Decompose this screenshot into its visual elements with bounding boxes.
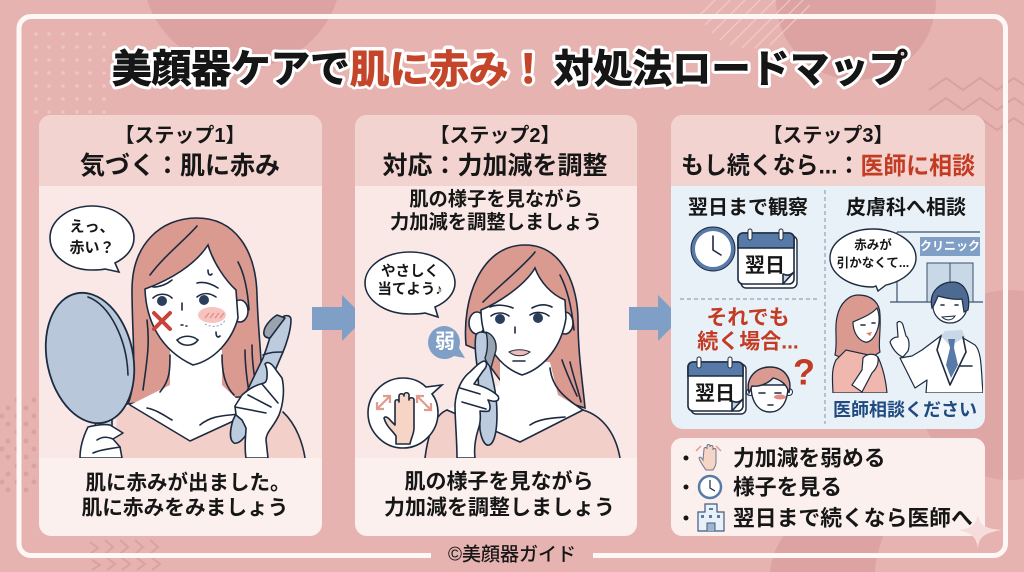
title: [112, 48, 908, 92]
warning text: [697, 306, 799, 354]
speech bubble: gentle: 当てよう♪: [377, 280, 443, 298]
sparkle: [958, 514, 1002, 548]
badge: weak: [428, 326, 465, 359]
hand holding device: [235, 363, 283, 458]
consult caption: 医師相談ください: [833, 400, 977, 420]
hand holding device: [455, 361, 499, 458]
arrow: step 1 to 2: [312, 295, 365, 341]
hand icon bubble: [368, 378, 442, 448]
arrow: step 2 to 3: [629, 295, 681, 341]
question mark: ?: [793, 352, 815, 392]
step 2 intro text: [390, 188, 602, 234]
speech bubble: consultation: 赤みが: [854, 237, 892, 252]
step 3 heading: もし続くなら...：医師に相談: [681, 152, 975, 180]
speech bubble: gentle: やさしく: [381, 263, 439, 280]
step 1 caption: 肌に赤みをみましょう: [82, 496, 288, 520]
step 1 label: 【ステップ1】: [114, 124, 246, 147]
icon: clock: [691, 227, 735, 271]
badge: weak: 弱: [435, 330, 455, 353]
illustration: clinic consultation: [832, 232, 983, 393]
hand mirror: [44, 292, 136, 458]
speech bubble: surprised: えっ、: [69, 218, 115, 236]
speech bubble: consultation: 引かなくて...: [837, 256, 909, 270]
speech bubble: surprised: 赤い？: [69, 240, 115, 256]
item: see doctor: 翌日まで続くなら医師へ: [733, 506, 973, 530]
item: reduce pressure: 力加減を弱める: [733, 446, 886, 470]
footer credit: ©美顔器ガイド: [448, 544, 576, 566]
illustration: woman noticing redness: [34, 206, 305, 458]
step 2 intro text: 肌の様子を見ながら: [409, 188, 583, 210]
step 2 heading: 対応：力加減を調整: [382, 152, 608, 180]
item: watch condition: 様子を見る: [733, 474, 842, 500]
step 2 label: 【ステップ2】: [429, 124, 561, 147]
icon: calendar second: 翌日: [695, 383, 735, 405]
panel: step 3: [671, 115, 985, 429]
step 1 caption: [82, 470, 290, 520]
speech bubble: gentle: [365, 252, 455, 317]
title: 美顔器ケアで肌に赤み！: [112, 48, 548, 92]
icon: calendar second: [688, 357, 746, 414]
facial device: [230, 315, 291, 443]
icon: worried face: [746, 367, 792, 412]
step 2 intro text: 力加減を調整しましょう: [390, 210, 602, 234]
clinic building: [890, 232, 983, 302]
title: 対処法ロードマップ: [554, 48, 908, 92]
clinic building: クリニック: [920, 239, 980, 253]
red cross mark: [154, 313, 170, 329]
title: 美顔器ケアで肌に赤み！: [112, 48, 548, 92]
icon: calendar next day: 翌日: [745, 255, 785, 277]
panel: step 1: [34, 115, 322, 536]
facial device: [475, 332, 497, 445]
step 1 heading: 気づく：肌に赤み: [80, 152, 280, 180]
item: watch condition: [684, 474, 842, 500]
warning text: それでも: [706, 306, 790, 330]
doctor: [890, 282, 983, 393]
icon: calendar next day: [738, 229, 797, 288]
step 1 caption: 肌に赤みが出ました。: [86, 470, 290, 494]
title: 対処法ロードマップ: [554, 48, 908, 92]
step 2 caption: 力加減を調整しましょう: [384, 496, 615, 520]
step 3 label: 【ステップ3】: [762, 124, 894, 147]
subheading: observe: 翌日まで観察: [688, 196, 808, 219]
step 2 caption: [384, 470, 615, 520]
panel: step 2: [355, 115, 637, 536]
step 2 caption: 肌の様子を見ながら: [404, 470, 594, 494]
speech bubble: consultation: [830, 229, 916, 291]
speech bubble: surprised: [50, 206, 134, 272]
panel: summary checklist: [671, 438, 985, 536]
warning text: 続く場合...: [697, 330, 799, 354]
illustration: woman adjusting pressure: [365, 245, 620, 458]
patient: [832, 295, 887, 393]
subheading: dermatology: 皮膚科へ相談: [846, 196, 966, 219]
